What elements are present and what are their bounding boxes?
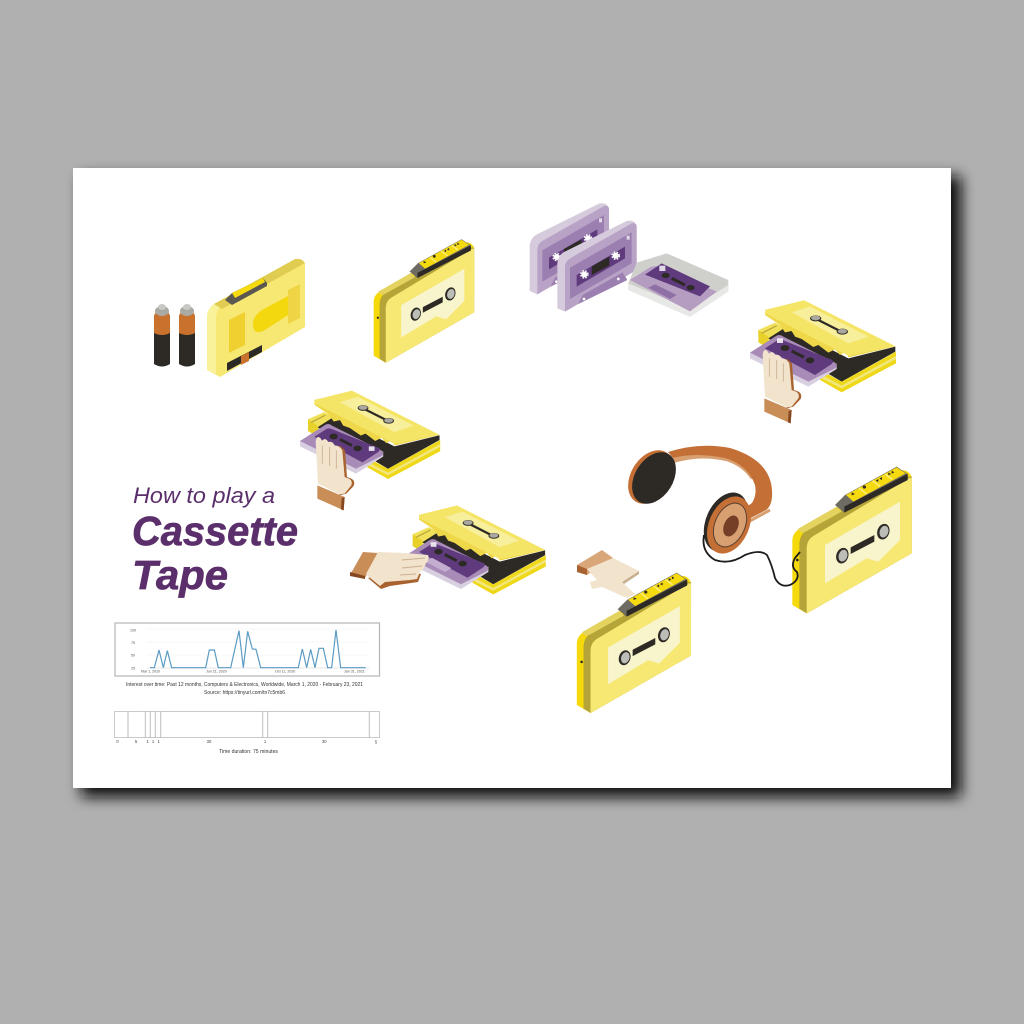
card drop shadow	[81, 176, 961, 797]
timeline bar: time duration: 1	[264, 739, 267, 744]
timeline bar: time duration: 5	[135, 739, 138, 744]
headphone cable	[703, 535, 800, 586]
line chart: interest over time: 50	[131, 654, 135, 658]
line chart: interest over time: 75	[131, 641, 135, 645]
white poster panel	[73, 168, 951, 788]
chart caption: Source: https://tinyurl.com/tn7c5mb6	[204, 690, 285, 696]
line chart: interest over time: 100	[130, 628, 136, 632]
line chart: interest over time: Jun 21, 2020	[206, 670, 227, 674]
icon: cassette player back with battery slots	[207, 259, 305, 377]
icon: pointing hand pressing play	[577, 550, 639, 598]
chart caption: Interest over time: Past 12 months, Computers & Electronics, Worldwide, March 1, 2020 - February 23, 2021	[126, 682, 363, 688]
timeline bar: time duration: 30	[322, 739, 327, 744]
icon: open player with tape (middle left)	[300, 391, 440, 479]
timeline bar: time duration: 1	[158, 739, 161, 744]
icon: open player with hand inserting tape (top right)	[750, 300, 896, 423]
icon: two batteries	[154, 304, 195, 366]
timeline bar: time duration: 30	[207, 739, 212, 744]
line chart: interest over time	[115, 623, 380, 676]
timeline bar: time duration: 1	[152, 739, 155, 744]
timeline bar: time duration: 0	[116, 739, 119, 744]
icon: open player with tape inserted (middle)	[405, 506, 546, 595]
timeline bar: time duration	[114, 711, 380, 744]
line chart: interest over time: Oct 11, 2020	[275, 670, 295, 674]
icon: cassette player with headphones plugged in (right)	[792, 467, 912, 613]
timeline bar: time duration: 5	[375, 740, 378, 744]
line chart: interest over time: Mar 1, 2020	[141, 670, 160, 674]
title: Cassette	[132, 508, 298, 554]
headphones	[619, 442, 772, 561]
icon: cassette player front (top centre)	[374, 239, 474, 363]
chart caption	[126, 682, 363, 696]
title: Tape	[132, 552, 228, 598]
line chart: interest over time: 25	[131, 666, 135, 670]
icon: cassette player front (bottom)	[577, 573, 691, 713]
icon: hand holding tape (middle left)	[316, 437, 354, 510]
icon: hand pushing tape from left	[350, 552, 429, 589]
timeline bar: time duration: 1	[147, 739, 150, 744]
title: How to play a	[133, 483, 275, 508]
timeline caption: Time duration: 75 minutes	[219, 749, 279, 755]
title	[132, 483, 298, 598]
icon: two cassette tapes and open case	[530, 203, 728, 317]
line chart: interest over time: Jan 31, 2021	[344, 670, 365, 674]
